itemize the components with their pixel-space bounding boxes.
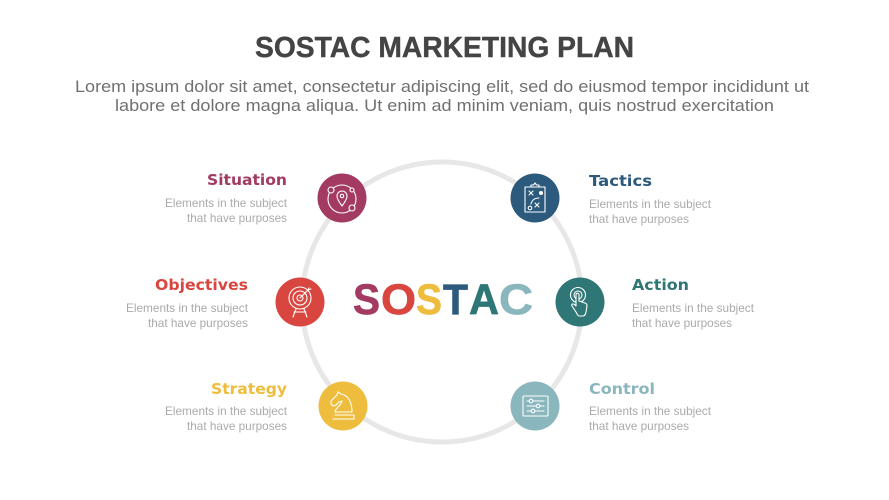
heading: Control: Control [589,380,655,398]
icon: target [276,278,324,326]
subtitle: Lorem ipsum dolor sit amet, consectetur adipiscing elit, sed do eiusmod tempor incididunt ut [75,77,809,96]
text: Tactics description: that have purposes [589,212,689,226]
text: Control description [589,404,712,433]
title: SOSTAC MARKETING PLAN [255,32,634,64]
text: Objectives description: that have purposes [148,316,248,330]
icon: sliders panel [510,382,560,430]
center word SOSTAC: S [353,276,380,324]
icon: chess knight [318,382,368,430]
text: Action description: Elements in the subject [632,301,755,315]
heading: Situation: Situation [207,171,287,189]
text: Tactics description: Elements in the subject [589,197,712,211]
panel: Control [510,380,712,433]
text: Objectives description: Elements in the subject [126,301,249,315]
central ring [302,162,582,442]
panel: Action [556,276,755,330]
subtitle [75,77,809,115]
panel: Situation [165,171,366,225]
icon: location orbit [318,174,366,222]
heading: Action: Action [632,276,689,294]
text: Objectives description [126,301,249,330]
heading: Objectives: Objectives [155,276,248,294]
center word SOSTAC: C [499,276,533,324]
center word SOSTAC: O [381,276,416,324]
panel: Strategy [165,380,368,433]
text: Action description [632,301,755,330]
panel: Tactics [510,172,712,226]
center word SOSTAC: S [416,276,442,324]
text: Situation description: Elements in the subject [165,196,288,210]
center word SOSTAC: T [443,276,468,324]
text: Situation description [165,196,288,225]
subtitle: labore et dolore magna aliqua. Ut enim ad minim veniam, quis nostrud exercitation [115,96,774,115]
text: Action description: that have purposes [632,316,732,330]
center word SOSTAC: A [469,276,499,324]
icon: clipboard tactics [510,174,560,222]
text: Control description: that have purposes [589,419,689,433]
icon: touch hand [556,278,604,326]
text: Control description: Elements in the subject [589,404,712,418]
text: Strategy description: Elements in the subject [165,404,288,418]
text: Strategy description [165,404,288,433]
heading: Strategy: Strategy [211,380,287,398]
text: Situation description: that have purposes [187,211,287,225]
text: Strategy description: that have purposes [187,419,287,433]
panel: Objectives [126,276,324,330]
heading: Tactics: Tactics [589,172,652,190]
text: Tactics description [589,197,712,226]
center word SOSTAC [353,276,533,324]
